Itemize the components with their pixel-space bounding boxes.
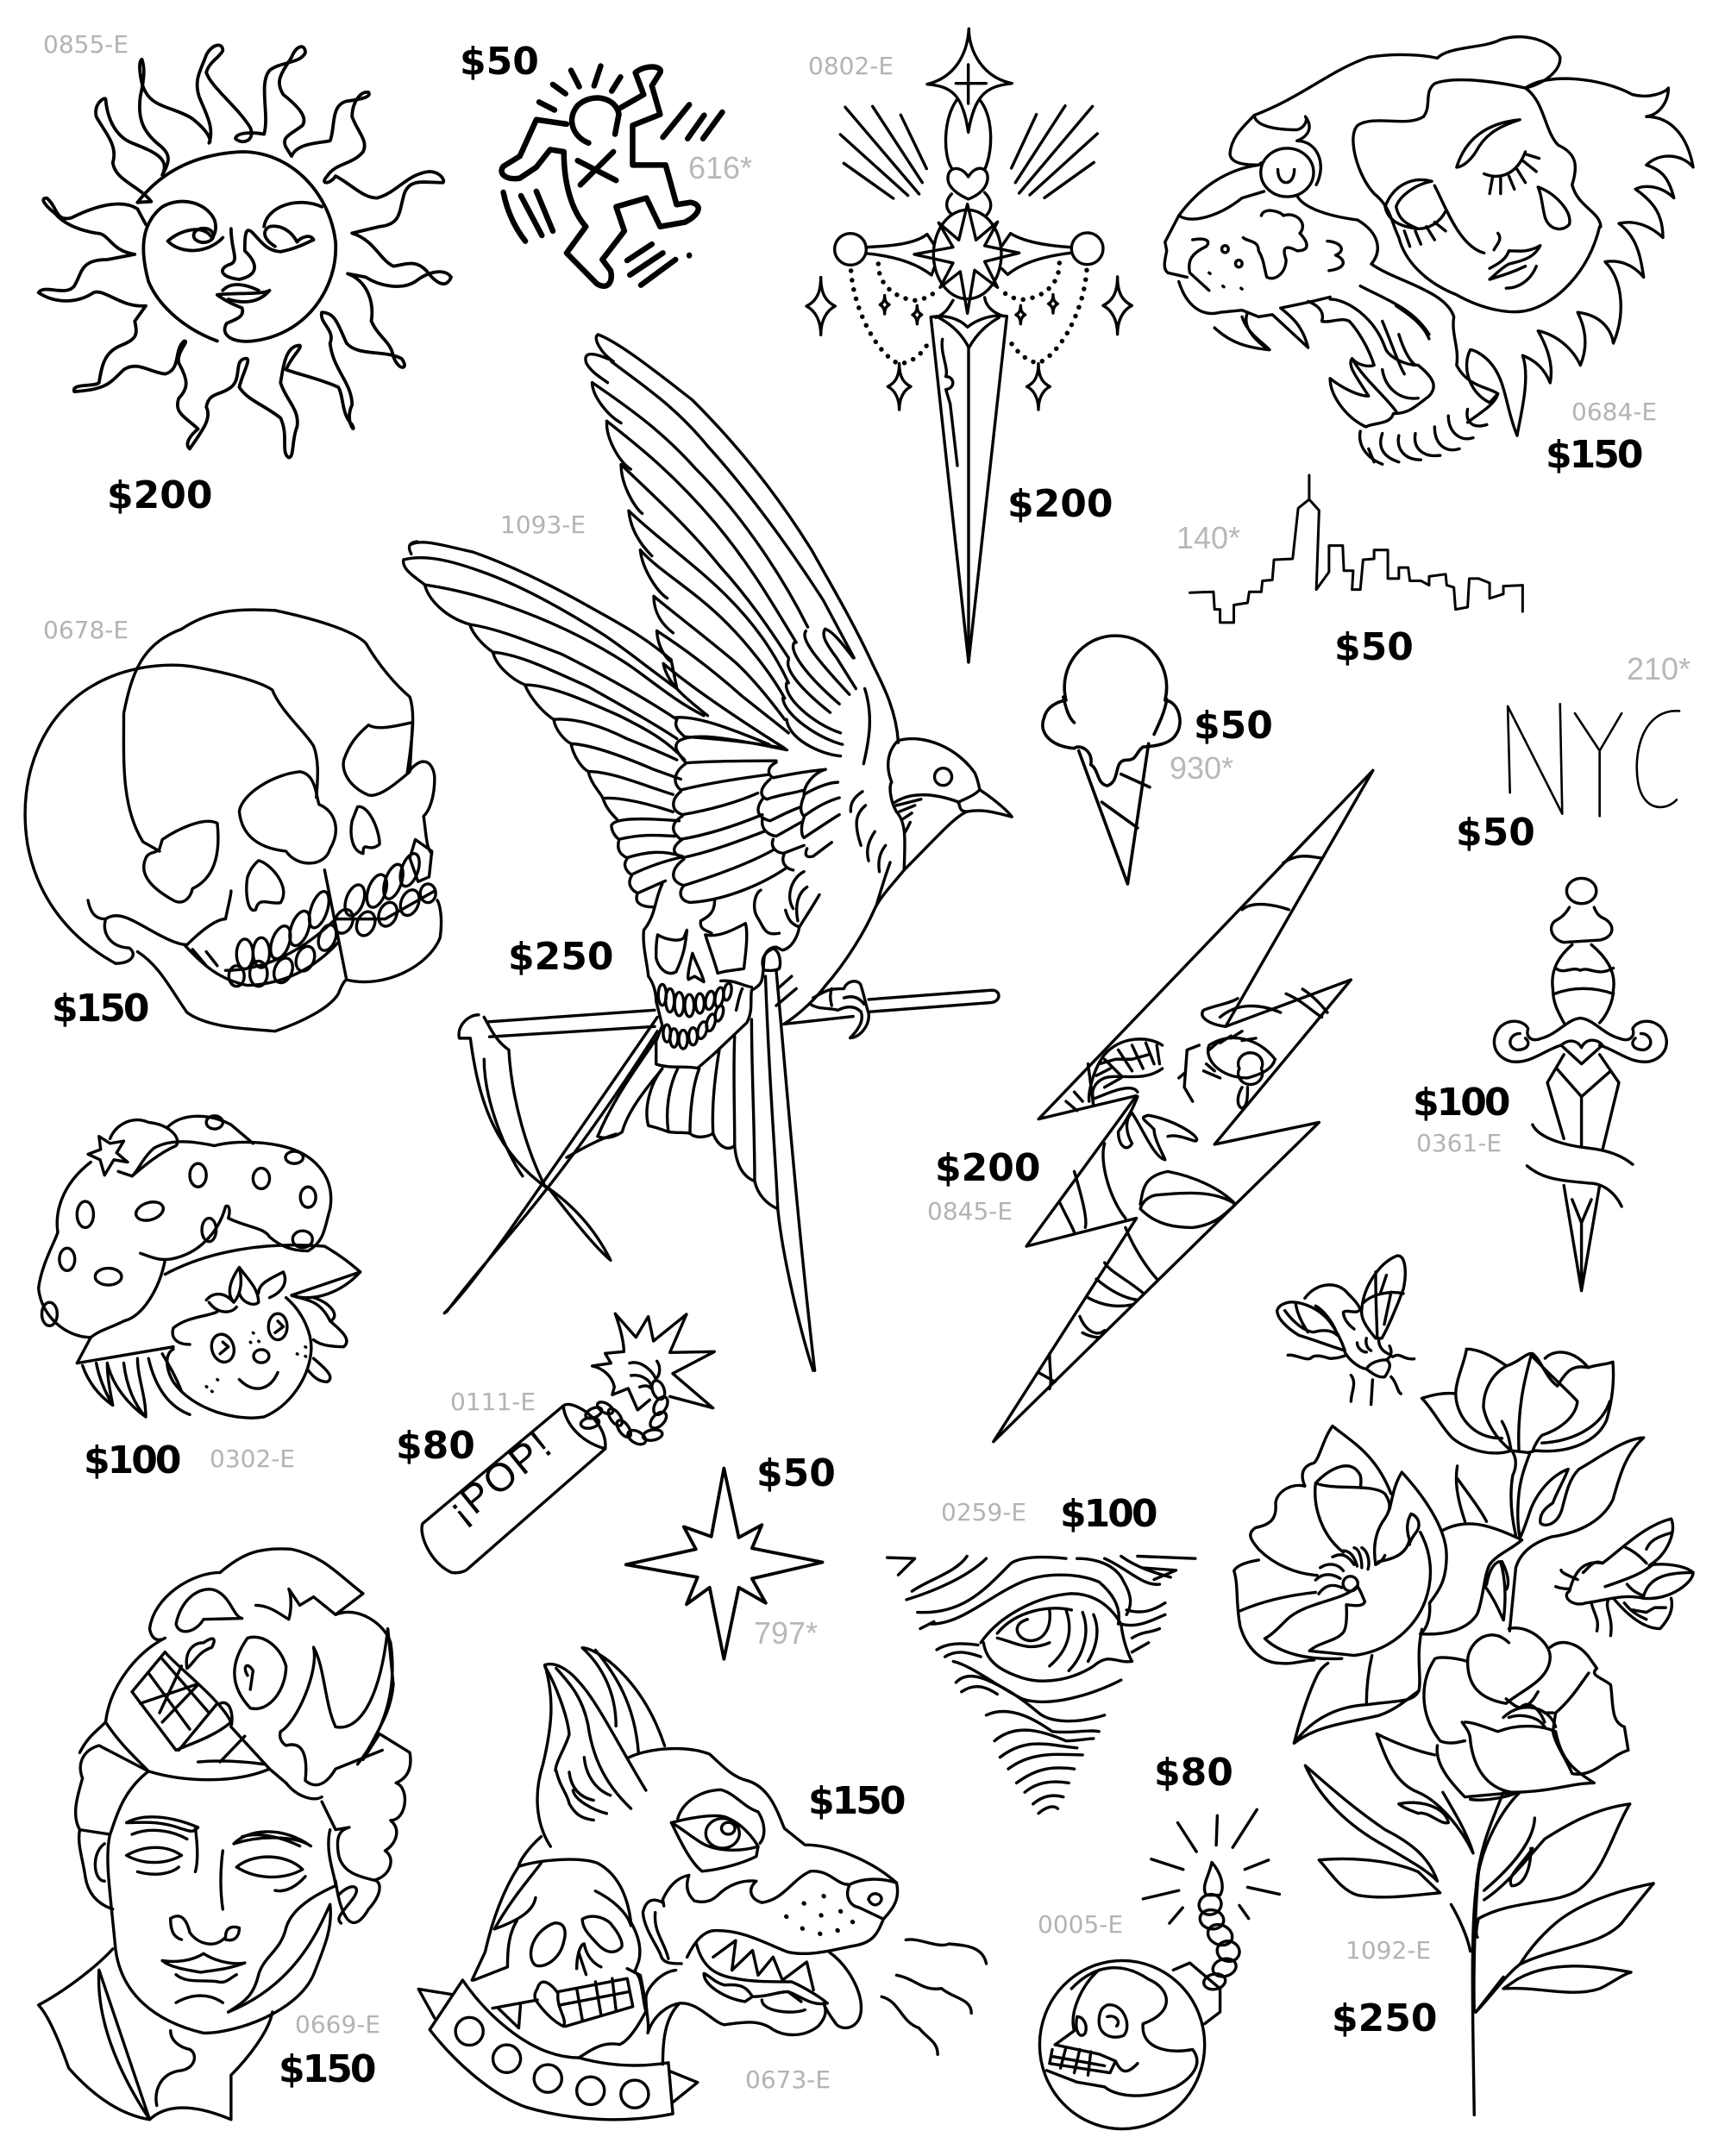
price: skulls: $150 [52, 987, 148, 1031]
price: bomb: $80 [1154, 1751, 1233, 1795]
icon: classical bust with broken skull [39, 1549, 411, 2120]
code: eye triangle: 0259-E [941, 1498, 1026, 1526]
icon: north star [626, 1469, 823, 1659]
code: doberman: 0673-E [745, 2065, 831, 2094]
icon: panther head with crying woman [1164, 37, 1693, 464]
icon: firecracker with POP lettering [422, 1313, 714, 1573]
icon: lightning bolt with face [994, 770, 1373, 1442]
number: dancing figure: 616* [688, 150, 752, 185]
price: NYC: $50 [1456, 811, 1535, 855]
icon: ice cream cone [1043, 636, 1180, 884]
price: strawberry character: $100 [84, 1438, 180, 1482]
scythe and tail streamers [444, 1010, 657, 1313]
icon: hand-lettered NYC [1508, 704, 1679, 816]
price: panther: $150 [1546, 433, 1642, 477]
code: swallow: 1093-E [500, 511, 586, 539]
price: dancing figure: $50 [460, 40, 539, 84]
price: north star: $50 [756, 1451, 836, 1495]
code: bomb: 0005-E [1038, 1910, 1123, 1939]
number: north star: 797* [754, 1615, 818, 1651]
lower flowers, stem, leaves and bee [1305, 1519, 1693, 2115]
code: classical bust: 0669-E [295, 2010, 380, 2039]
number: NYC: 210* [1627, 651, 1690, 686]
price: doberman: $150 [808, 1779, 905, 1823]
code: flowers: 1092-E [1346, 1936, 1431, 1965]
price: eye triangle: $100 [1060, 1492, 1157, 1536]
number: ice cream: 930* [1170, 750, 1233, 786]
code: panther: 0684-E [1571, 398, 1657, 426]
price: lightning bolt: $200 [935, 1146, 1040, 1190]
price: ice cream: $50 [1194, 704, 1273, 748]
price: firecracker: $80 [396, 1424, 475, 1468]
icon: doberman with skull and spiked collar [418, 1648, 987, 2120]
code: ornate dagger: 0802-E [808, 52, 894, 80]
icon: ornate star dagger [806, 28, 1132, 662]
bird wings [404, 335, 898, 819]
number: skyline: 140* [1176, 520, 1240, 555]
price: skyline: $50 [1334, 625, 1414, 669]
icon: double-exposed skulls [25, 610, 442, 1031]
price: flowers: $250 [1332, 1996, 1437, 2040]
icon: New York skyline [1189, 475, 1522, 623]
icon: bomb with skull [1039, 1809, 1279, 2129]
code: firecracker: 0111-E [450, 1388, 536, 1416]
code: lightning bolt: 0845-E [927, 1197, 1013, 1225]
icon: sun with face [39, 45, 451, 458]
code: strawberry character: 0302-E [210, 1445, 295, 1473]
bird body and skull [598, 736, 1012, 1370]
price: classical bust: $150 [279, 2047, 375, 2091]
price: ornate dagger: $200 [1007, 482, 1113, 526]
code: sun: 0855-E [43, 30, 129, 59]
icon: Keith Haring dancing figure [502, 66, 722, 286]
icon: swallow with skull and scythe [404, 335, 1012, 1370]
price: sun: $200 [107, 473, 212, 517]
code: skulls: 0678-E [43, 616, 129, 644]
icon: flower bouquet with bees [1234, 1256, 1693, 2115]
price: small dagger: $100 [1413, 1081, 1509, 1125]
icon: eye in triangle [888, 1556, 1195, 1814]
text: firecracker lettering: ¡POP! [439, 1421, 561, 1532]
upper flowers and fly [1234, 1256, 1644, 1743]
price: swallow: $250 [508, 935, 613, 979]
icon: small traditional dagger with banner [1494, 878, 1666, 1291]
code: small dagger: 0361-E [1416, 1129, 1502, 1157]
icon: Strawberry Shortcake character [39, 1116, 361, 1418]
